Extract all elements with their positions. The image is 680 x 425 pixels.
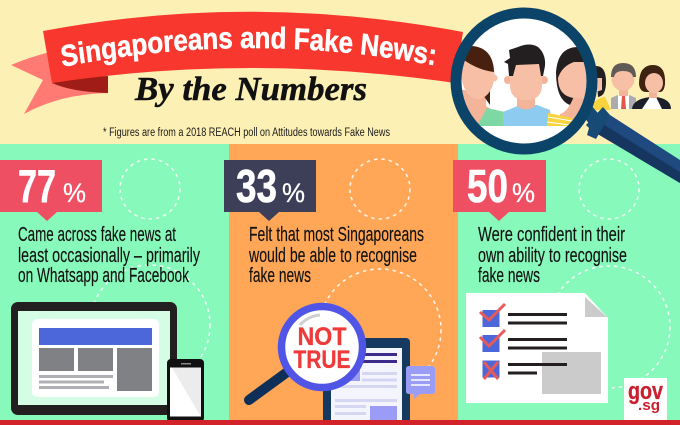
title text: Singaporeans and Fake News: bbox=[61, 26, 436, 66]
lens with people bbox=[462, 18, 586, 144]
people outside lens bbox=[590, 63, 671, 110]
icon: article tablet bbox=[323, 338, 410, 425]
badge: 77% bbox=[0, 160, 102, 221]
title ribbon bbox=[11, 12, 463, 114]
badge: 77%: 77 bbox=[18, 160, 56, 212]
text: 50% description: fake news bbox=[478, 265, 540, 287]
icon: not true magnifier bbox=[249, 306, 362, 400]
text: 33% description: fake news bbox=[249, 265, 311, 287]
icon: not true magnifier: TRUE bbox=[294, 346, 350, 374]
not true text: NOT bbox=[298, 323, 346, 351]
badge: 33%: 33 bbox=[236, 160, 277, 212]
badge: 77%: % bbox=[63, 178, 86, 208]
bottom red strip bbox=[0, 420, 680, 425]
text: 77% description: Came across fake news at bbox=[18, 224, 176, 246]
logo: gov.sg: .sg bbox=[638, 397, 660, 414]
text: 33% description: Felt that most Singaporeans bbox=[249, 224, 424, 246]
text: 77% description: least occasionally – primarily bbox=[18, 245, 200, 267]
person: centre man bbox=[503, 44, 551, 126]
text: 33% description: would be able to recognise bbox=[248, 245, 417, 267]
subtitle: By the Numbers bbox=[134, 71, 367, 108]
text: 77% description: on Whatsapp and Facebook bbox=[18, 265, 190, 287]
lens ring bbox=[456, 13, 592, 149]
icon: checklist document bbox=[466, 293, 608, 403]
text: 77% description bbox=[18, 224, 200, 287]
badge: 50%: 50 bbox=[467, 160, 508, 212]
icon: laptop with web page bbox=[11, 302, 177, 415]
icon: chat bubble bbox=[406, 366, 435, 399]
magnifying glass handle bbox=[580, 104, 680, 183]
footnote: * Figures are from a 2018 REACH poll on Attitudes towards Fake News bbox=[103, 127, 390, 139]
text: 33% description bbox=[248, 224, 424, 287]
logo: gov.sg: gov bbox=[628, 378, 664, 405]
person: right woman bbox=[547, 47, 586, 126]
logo: gov.sg bbox=[624, 378, 667, 420]
badge: 33% bbox=[224, 160, 316, 221]
icon: phone bbox=[167, 359, 204, 422]
panel: 77 percent background bbox=[0, 144, 229, 425]
badge: 50% bbox=[453, 160, 546, 221]
text: 50% description: own ability to recognise bbox=[478, 245, 627, 267]
panel: 33 percent background bbox=[229, 144, 458, 425]
person: left woman bbox=[462, 46, 504, 126]
text: 50% description bbox=[478, 224, 627, 287]
panel: 50 percent background bbox=[458, 144, 680, 425]
text: 50% description: Were confident in their bbox=[478, 224, 625, 246]
badge: 33%: % bbox=[282, 178, 305, 208]
badge: 50%: % bbox=[512, 178, 535, 208]
header background bbox=[0, 0, 680, 145]
